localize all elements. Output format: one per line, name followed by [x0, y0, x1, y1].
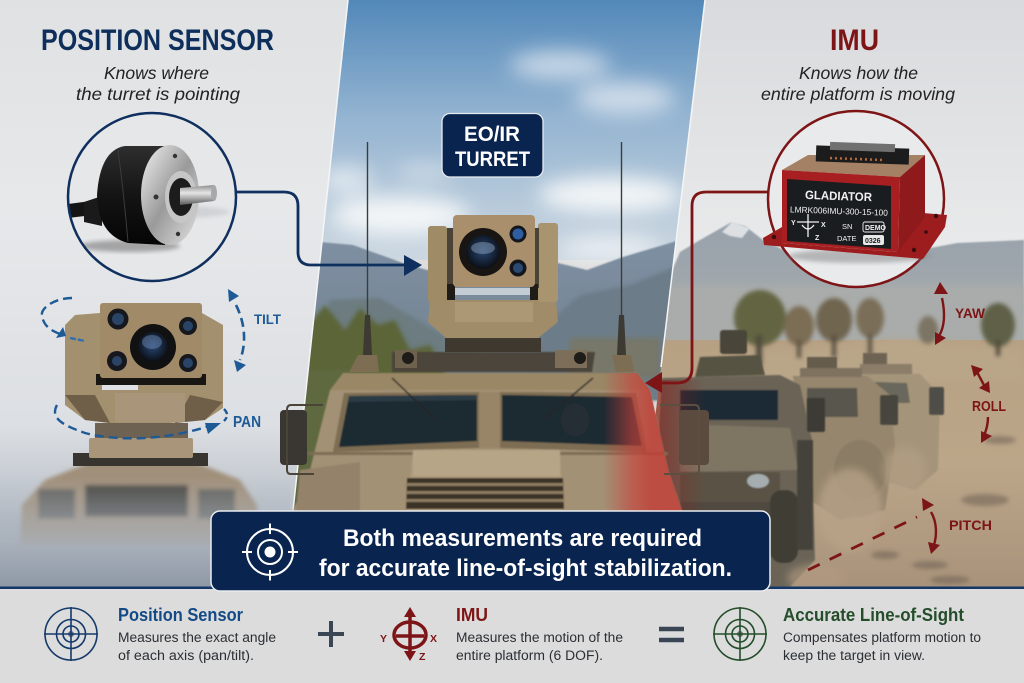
icon: IMU module in circle: SN — [842, 222, 852, 231]
text: IMU summary — [456, 605, 623, 663]
icon: IMU axes: Z — [419, 651, 426, 663]
text: IMU summary: entire platform (6 DOF). — [456, 648, 603, 663]
text: IMU summary: IMU — [456, 605, 488, 625]
text: IMU tagline — [761, 63, 955, 104]
icon: position sensor target — [44, 607, 98, 661]
icon: IMU module in circle: 0326 — [865, 238, 881, 245]
icon: left vehicle mirror — [280, 405, 323, 474]
text: position sensor tagline: the turret is pointing — [76, 84, 240, 104]
text: position sensor summary: Position Sensor — [118, 605, 243, 625]
icon: IMU module in circle: LMRK006IMU-300-15-100 — [790, 204, 888, 218]
panel: bottom legend strip — [0, 586, 1024, 683]
arrow: roll — [971, 365, 992, 443]
illustration: second convoy vehicle — [793, 357, 898, 520]
icon: IMU module in circle: Z — [815, 235, 820, 242]
heading: position sensor: POSITION SENSOR — [41, 24, 274, 57]
text: accurate line-of-sight summary — [783, 605, 981, 663]
panel: center scene background — [280, 0, 710, 510]
callout: stabilization banner: Both measurements are required — [343, 525, 702, 552]
text: IMU tagline: entire platform is moving — [761, 84, 955, 104]
illustration: lead convoy vehicle — [650, 330, 825, 587]
illustration: left turret close-up with vehicle — [0, 303, 290, 587]
arrow: IMU to platform — [645, 192, 768, 393]
overlay: red highlight on platform — [600, 373, 682, 511]
icon: IMU axes — [380, 607, 437, 663]
arrow: position sensor to turret — [237, 192, 422, 276]
label: pan: PAN — [233, 414, 261, 431]
text: accurate line-of-sight summary: Compensates platform motion to — [783, 630, 981, 645]
arrow: yaw — [934, 282, 948, 345]
illustration: center armored vehicle — [293, 373, 682, 511]
icon: IMU module in circle: DEMO — [865, 225, 887, 232]
icon: IMU module in circle: GLADIATOR — [805, 188, 873, 204]
illustration: third convoy vehicle — [860, 353, 944, 490]
text: accurate line-of-sight summary: Accurate Line-of-Sight — [783, 605, 964, 625]
text: position sensor summary — [118, 605, 276, 663]
arrow: tilt rotation — [228, 289, 246, 372]
heading: IMU: IMU — [830, 24, 879, 57]
text: IMU tagline: Knows how the — [799, 63, 918, 83]
label: roll: ROLL — [972, 399, 1006, 415]
icon: IMU module in circle — [763, 111, 947, 287]
label: EO/IR turret: TURRET — [455, 148, 530, 171]
icon: rotary encoder in circle — [60, 113, 236, 281]
icon: accurate line-of-sight target — [713, 607, 767, 661]
icon: IMU axes: X — [430, 633, 437, 645]
label: yaw: YAW — [955, 305, 986, 321]
text: position sensor tagline — [76, 63, 240, 104]
icon: IMU module in circle: X — [821, 222, 826, 229]
illustration: center turret antennas — [349, 142, 634, 372]
illustration: center EO/IR turret — [392, 215, 595, 372]
icon: IMU axes: Y — [380, 633, 387, 645]
icon: plus sign — [318, 621, 344, 647]
panel: left position sensor background — [0, 60, 340, 559]
text: accurate line-of-sight summary: keep the target in view. — [783, 648, 925, 663]
text: IMU summary: Measures the motion of the — [456, 630, 623, 645]
arrow: left azimuth rotation — [42, 298, 85, 341]
icon: right vehicle mirror — [660, 405, 709, 474]
text: position sensor summary: Measures the exact angle — [118, 630, 276, 645]
label: tilt: TILT — [254, 311, 281, 327]
label: EO/IR turret — [442, 114, 543, 177]
callout: stabilization banner: for accurate line-of-sight stabilization. — [319, 555, 732, 582]
label: EO/IR turret: EO/IR — [464, 123, 520, 146]
panel: right IMU background and terrain — [656, 151, 1024, 586]
text: position sensor summary: of each axis (pan/tilt). — [118, 648, 254, 663]
callout: stabilization banner — [211, 511, 770, 591]
icon: background trees — [734, 290, 1015, 365]
icon: banner crosshair — [242, 524, 298, 580]
label: pitch: PITCH — [949, 517, 992, 533]
arrow: pan rotation — [55, 405, 227, 438]
icon: IMU module in circle: DATE — [837, 234, 856, 243]
text: position sensor tagline: Knows where — [104, 63, 209, 83]
arrow: pitch — [808, 498, 940, 570]
icon: equals sign — [659, 629, 684, 640]
icon: IMU module in circle: Y — [791, 220, 796, 227]
divider: panel edges — [293, 0, 705, 511]
